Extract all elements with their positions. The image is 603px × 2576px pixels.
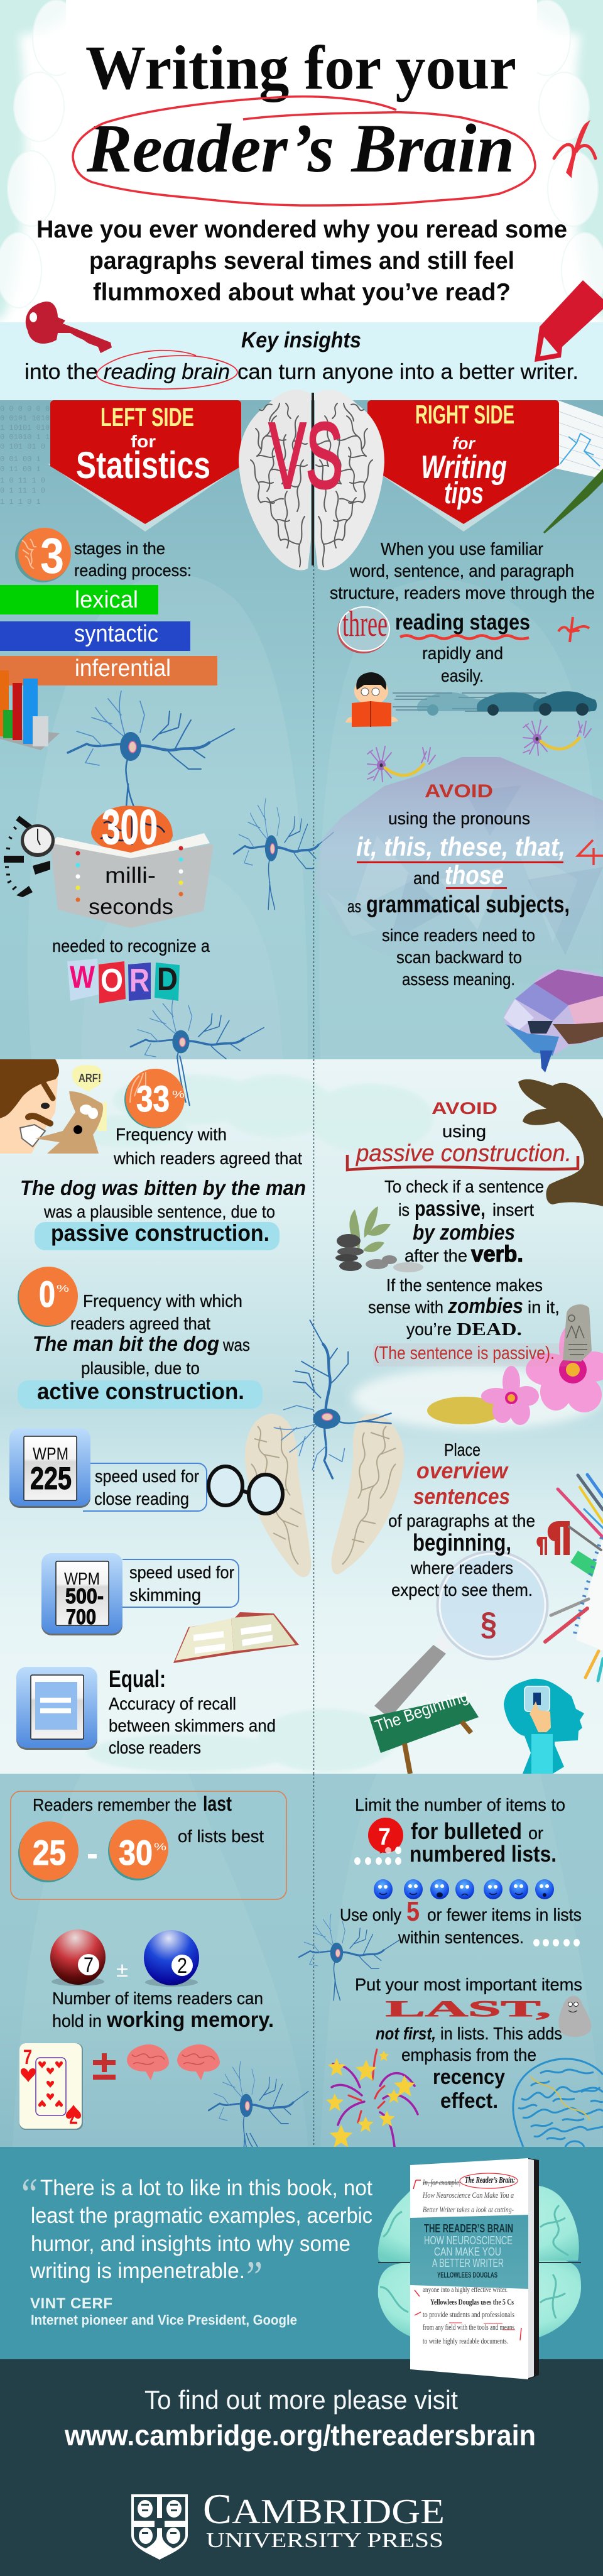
equal text: close readers [109, 1738, 201, 1757]
teal brain behind book [378, 2185, 581, 2340]
url: www.cambridge.org/thereadersbrain [64, 2419, 536, 2452]
tips: tips [444, 477, 484, 510]
callout: speed skimming [122, 1559, 239, 1607]
to check if passive text: passive, [415, 1197, 486, 1221]
place overview sentences text: expect to see them. [391, 1580, 533, 1600]
card: WPM 500-700: 700 [66, 1605, 96, 1629]
cover text below band: Yellowlees Douglas uses the 5 Cs [430, 2297, 514, 2306]
300: 300 [102, 799, 158, 854]
if the sentence text: zombies [447, 1294, 523, 1318]
equal text: Accuracy of recall [109, 1694, 236, 1713]
frequency text 2: The man bit the dog [33, 1332, 219, 1355]
icon: head with fingerprint [504, 1679, 584, 1774]
since readers need to: scan backward to [396, 947, 522, 967]
place overview sentences text: overview [416, 1458, 509, 1483]
WORD cut-out letters [67, 959, 180, 1003]
place overview sentences text: where readers [410, 1558, 513, 1578]
cover text above band: The Reader’s Brain: [465, 2176, 515, 2185]
quote: writing is impenetrable. [30, 2259, 245, 2283]
if the sentence text [368, 1275, 560, 1340]
place overview sentences text [388, 1440, 535, 1600]
card: WPM 225: 225 [30, 1461, 72, 1496]
billiard balls 7 plus minus 2 [50, 1929, 199, 1987]
icon: red pencil [535, 280, 603, 362]
cover band [410, 2215, 528, 2289]
call to action: To find out more please visit [144, 2385, 458, 2415]
avoid pronouns heading: AVOID [425, 781, 493, 802]
sign: the beginning [369, 1686, 479, 1774]
red hand-drawn ellipse [73, 97, 535, 205]
WORD cut-out letters: R [129, 963, 149, 999]
sentence: the dog was bitten: The dog was bitten by the man [20, 1176, 306, 1199]
WORD cut-out letters: W [70, 959, 95, 995]
working memory text: working memory. [106, 2008, 274, 2032]
quote: humor, and insights into why some [31, 2232, 350, 2256]
red squiggle underline [400, 636, 529, 639]
decorative lobes [13, 1774, 603, 2147]
cover text above band: How Neuroscience Can Make You a [422, 2190, 514, 2200]
card: WPM 500-700 [41, 1553, 122, 1635]
background: teal section [0, 400, 603, 1059]
place overview sentences text: beginning, [413, 1530, 511, 1556]
put most important last text: emphasis from the [401, 2045, 536, 2065]
brain halves [245, 1414, 404, 1577]
coloured dots [75, 846, 183, 902]
binary digits decoration: 1 10101 0101 [0, 423, 54, 432]
33 percent circle: 33 [136, 1079, 170, 1120]
frequency text 2: readers agreed that [70, 1314, 210, 1333]
blue smileys [374, 1879, 554, 1899]
Cambridge wordmark: AMBRIDGE [232, 2492, 445, 2531]
playing card 7 of hearts: 7 [23, 2046, 32, 2068]
limit items text: for bulleted [411, 1818, 522, 1844]
icon: speeding cars [393, 691, 597, 716]
writing: Writing [421, 449, 507, 486]
centre dashed divider [313, 565, 314, 2147]
binary digits decoration: 0 11 00 1 [0, 465, 41, 474]
box: readers remember: last [203, 1792, 232, 1815]
right chevron: right side for writing tips [365, 400, 562, 532]
rapidly and easily [422, 643, 503, 685]
book cover [50, 843, 214, 928]
binary digits decoration: 1 1 1 0 1 [0, 498, 41, 506]
use only 5 text: Use only [340, 1905, 401, 1924]
use only 5 text: within sentences. [398, 1928, 524, 1947]
book cover: CAN MAKE YOU [434, 2246, 501, 2258]
title line 2: Reader’s Brain [86, 110, 514, 187]
callout: speed close reading: speed used for [95, 1466, 199, 1486]
since readers need to: since readers need to [382, 925, 535, 945]
using: using [442, 1122, 486, 1141]
place overview sentences text: Place [444, 1440, 481, 1460]
icon: boy reading [345, 672, 398, 727]
card: equal [16, 1667, 97, 1750]
right: familiar structure: word, sentence, and paragraph [349, 561, 574, 581]
cartoon: man and dog: ARF! [79, 1072, 101, 1084]
intro question: flummoxed about what you’ve read? [93, 279, 511, 306]
icon: leaf and stones [335, 1206, 423, 1272]
needed to recognize a: needed to recognize a [52, 936, 210, 956]
30 circle [108, 1821, 167, 1880]
callout: speed skimming: speed used for [129, 1563, 234, 1582]
cover text above band: In, for example, [422, 2178, 460, 2188]
if the sentence text: If the sentence makes [386, 1275, 543, 1295]
if the sentence text: in it, [528, 1297, 560, 1317]
cover text below band: anyone into a highly effective writer. [423, 2285, 508, 2294]
card: WPM 500-700: WPM [64, 1569, 100, 1588]
put most important last text: LAST, [386, 1996, 551, 2021]
quote text: There is a lot to like in this book, not [40, 2176, 372, 2200]
0 percent circle [18, 1267, 78, 1327]
300 milliseconds book: seconds [89, 895, 173, 919]
icon: 3D bar chart [0, 670, 60, 750]
book cover: YELLOWLEES DOUGLAS [437, 2271, 497, 2279]
0 percent circle: 0 [39, 1274, 55, 1315]
frequency text 1: Frequency with [116, 1125, 227, 1144]
book cover [410, 2158, 539, 2379]
readers remember text: Readers remember the [33, 1795, 197, 1815]
stat: 3 stages [15, 528, 192, 584]
icon: maze brain [513, 2059, 603, 2147]
pronoun list: it, this, these, that, [356, 832, 565, 861]
red brain 1 [127, 2044, 169, 2080]
neuron 2 [234, 799, 334, 909]
pilcrow marks [536, 1521, 570, 1555]
right: familiar structure: structure, readers move through the [330, 583, 595, 603]
book pages [50, 833, 210, 860]
red pin 7 [368, 1818, 403, 1853]
binary digits decoration [0, 405, 54, 506]
cover text below band: to write highly readable documents. [423, 2336, 508, 2345]
three badge: three [342, 603, 388, 644]
left side label: LEFT SIDE [100, 402, 194, 432]
to check if passive text: by zombies [413, 1221, 515, 1245]
white bullet dots [354, 1847, 401, 1865]
Cambridge shield [131, 2494, 188, 2560]
icon: notebook and pencils [545, 1475, 603, 1681]
intro question [36, 216, 567, 306]
cover text above band: Better Writer takes a look at cutting- [423, 2205, 514, 2214]
if the sentence text: DEAD. [457, 1320, 522, 1340]
to check if passive text: verb. [471, 1241, 523, 1267]
since readers need to [382, 925, 535, 989]
billiard balls 7 plus minus 2: 7 [84, 1953, 94, 1977]
if the sentence text: you’re [406, 1319, 452, 1339]
key insights sentence: can turn anyone into a better writer. [237, 360, 579, 384]
red brain 2 [177, 2044, 220, 2080]
cartoon: man and dog [0, 1059, 107, 1154]
intro question: Have you ever wondered why you reread some [36, 216, 567, 243]
book cover: HOW NEUROSCIENCE [424, 2234, 513, 2247]
box: readers remember [11, 1791, 286, 1899]
the sentence is passive band: (The sentence is passive). [374, 1343, 555, 1363]
right: familiar structure: When you use familiar [381, 539, 543, 559]
binary digits decoration: 0 101 01 0 [0, 442, 45, 451]
callout: speed close reading: close reading [94, 1489, 189, 1509]
purple neuron a [523, 720, 591, 755]
bar: lexical: lexical [75, 587, 138, 613]
red proofreading mark [558, 617, 589, 642]
flower image [352, 1324, 603, 1429]
sign: the beginning: The Beginning [372, 1686, 471, 1736]
limit items text: numbered lists. [410, 1841, 557, 1867]
pill: passive construction: passive construction. [51, 1220, 269, 1246]
notepad with sketch and pen [544, 400, 603, 533]
to check if passive text: insert [492, 1200, 534, 1220]
low-poly brain stem over section edge [540, 1051, 553, 1072]
footer band [0, 2359, 603, 2576]
right: familiar structure [330, 539, 595, 603]
decorative folds [0, 0, 603, 322]
card: WPM 225: WPM [33, 1444, 68, 1463]
frequency text 1 [113, 1125, 302, 1168]
playing card 7 of hearts [19, 2043, 83, 2130]
frequency text 1: which readers agreed that [113, 1149, 302, 1168]
cover text above band [413, 2173, 518, 2214]
pill: active construction: active construction. [37, 1378, 244, 1404]
billiard balls 7 plus minus 2: 2 [177, 1954, 187, 1978]
card: WPM 500-700: 500- [65, 1585, 104, 1608]
red numeral four [578, 840, 603, 865]
neuron 1 [68, 691, 234, 814]
low-poly colour brain [504, 969, 603, 1056]
card: WPM 225 [9, 1428, 90, 1508]
purple neuron b [367, 746, 435, 782]
rapidly and easily: easily. [441, 666, 484, 685]
red ellipse around reading brain [97, 351, 237, 389]
neuron 4 [274, 1320, 391, 1478]
orange brain [91, 805, 173, 856]
left chevron: left side for statistics [48, 400, 244, 532]
WORD cut-out letters: O [100, 963, 123, 999]
bar: inferential: inferential [75, 655, 171, 682]
equal text: Equal: [109, 1666, 166, 1693]
three badge [337, 603, 389, 653]
to check if passive text: after the [405, 1246, 467, 1265]
binary digits decoration: 0 0 0 0 0 0 [0, 405, 50, 413]
quote [21, 2169, 372, 2328]
was a plausible sentence: was a plausible sentence, due to [43, 1202, 275, 1221]
to check if passive text: is [398, 1200, 410, 1220]
put most important last text: in lists. This adds [440, 2024, 562, 2043]
if the sentence text: sense with [368, 1297, 443, 1317]
equal text [109, 1666, 276, 1757]
cover text below band: from any field with the tools and means [423, 2322, 514, 2332]
frequency text 2: was [222, 1335, 250, 1355]
bar: inferential [0, 655, 217, 685]
background: white title area [0, 0, 603, 322]
opening quote mark: “ [21, 2169, 38, 2219]
put most important last text [355, 1975, 582, 2113]
bar: lexical [0, 585, 158, 614]
33 percent circle [124, 1069, 185, 1128]
for: for [452, 434, 476, 453]
pronoun list: those [445, 860, 504, 890]
icon: tombstone [563, 1304, 592, 1362]
binary digits decoration: 0 01 00 1 [0, 455, 41, 464]
icon: magnifier [374, 1553, 546, 1718]
key insights sentence [24, 360, 579, 384]
stat: 3 stages: reading process: [74, 561, 192, 580]
callout: speed close reading [83, 1463, 207, 1511]
pronoun list: and [413, 868, 440, 888]
red pin 7: 7 [378, 1824, 391, 1850]
decorative brain folds [63, 1074, 433, 1772]
frequency text 2: Frequency with which [83, 1291, 242, 1311]
key insights band [0, 322, 603, 400]
25 circle [18, 1823, 77, 1882]
icon: red key [26, 302, 112, 353]
neuron 5 [299, 1914, 399, 2000]
bar: syntactic [0, 621, 190, 651]
frequency text 2: plausible, due to [81, 1358, 200, 1378]
billiard balls 7 plus minus 2: ± [116, 1958, 128, 1981]
icon: open book [173, 1612, 299, 1663]
working memory text: hold in [52, 2011, 102, 2031]
limit items text: or [528, 1823, 543, 1843]
use only 5 text: 5 [406, 1896, 420, 1927]
book cover: A BETTER WRITER [432, 2257, 504, 2269]
equal text: between skimmers and [109, 1716, 276, 1735]
callout: speed skimming: skimming [129, 1585, 201, 1605]
binary digits decoration: 0 01010 1 10 [0, 433, 54, 442]
place overview sentences text: of paragraphs at the [388, 1511, 535, 1531]
place overview sentences text: sentences [413, 1483, 510, 1509]
0 percent circle: % [57, 1284, 69, 1294]
icon: glasses [209, 1466, 283, 1514]
working memory text: Number of items readers can [52, 1989, 263, 2008]
zombie hand [518, 1079, 603, 1206]
key insights sentence: reading brain [104, 360, 230, 384]
intro question: paragraphs several times and still feel [89, 248, 514, 275]
box: readers remember: 30 [119, 1833, 153, 1872]
pronoun list [356, 832, 565, 890]
quote: least the pragmatic examples, acerbic [31, 2203, 372, 2228]
binary digits decoration: 0 0101 10101 [0, 414, 54, 423]
right side label: RIGHT SIDE [415, 400, 514, 429]
box: readers remember: 25 [33, 1833, 66, 1872]
put most important last text: not first, [376, 2024, 436, 2043]
statistics: Statistics [76, 444, 210, 486]
limit items text: Limit the number of items to [355, 1795, 565, 1815]
working memory text [52, 1989, 274, 2032]
brain top view [239, 390, 384, 570]
icon: stopwatch [4, 818, 55, 897]
neuron 6 [209, 2061, 308, 2159]
red proofreading mark [554, 124, 595, 175]
dash [88, 1854, 97, 1858]
put most important last text: effect. [440, 2089, 498, 2113]
300 milliseconds book [50, 799, 214, 928]
since readers need to: assess meaning. [402, 969, 515, 989]
to check if passive text [384, 1177, 544, 1267]
box: readers remember: % [154, 1841, 166, 1853]
cover title: THE READER’S BRAIN [424, 2222, 513, 2235]
using the pronouns: using the pronouns [388, 809, 530, 828]
passive construction in red: passive construction. [356, 1140, 572, 1167]
binary digits decoration: 1 0 11 1 0 [0, 476, 45, 485]
title line 1: Writing for your [85, 33, 516, 102]
neuron 3 [131, 998, 264, 1096]
red bracket [347, 1155, 578, 1170]
put most important last text: recency [433, 2065, 505, 2089]
use only 5 text [340, 1896, 582, 1947]
milli-seconds: milli- [105, 863, 156, 888]
of lists best: of lists best [178, 1826, 264, 1846]
rapidly and easily: rapidly and [422, 643, 503, 663]
Cambridge wordmark: UNIVERSITY PRESS [206, 2529, 443, 2552]
key insights sentence: into the [24, 360, 98, 384]
background: lower teal section [0, 1774, 603, 2147]
key insights heading: Key insights [241, 328, 361, 352]
cover text below band [415, 2285, 521, 2345]
closing quote mark: ” [246, 2252, 263, 2302]
five white dots [533, 1939, 580, 1946]
WORD cut-out letters: D [157, 961, 178, 998]
background: light section [0, 1059, 603, 1774]
stages text: stages in the [74, 539, 165, 558]
Cambridge wordmark: C [203, 2485, 232, 2533]
Cambridge wordmark [203, 2485, 445, 2552]
low-poly translucent brain behind AVOID text [313, 757, 603, 985]
frequency text 2 [33, 1291, 250, 1378]
limit items text [355, 1795, 565, 1867]
attribution: VINT CERF [30, 2295, 112, 2312]
reading stages: reading stages [395, 610, 530, 635]
cover text below band: to provide students and professionals [423, 2310, 514, 2319]
quote: Internet pioneer and Vice President, Google [31, 2312, 297, 2328]
neuron 3 axon over section edge [177, 1056, 190, 1106]
bar: syntactic: syntactic [74, 621, 158, 647]
section symbol: § [481, 1606, 497, 1642]
playing card 7 of hearts: 7 [69, 2105, 78, 2128]
stat: 3 stages: 3 [40, 528, 64, 584]
binary digits decoration: 0 1 11 1 0 [0, 486, 45, 495]
right: AVOID passive heading: AVOID [432, 1099, 497, 1118]
neuron 6 axon over section edge [246, 2133, 258, 2147]
orange brain circle with 3 [15, 528, 70, 582]
grammatical subjects: as [347, 897, 361, 916]
quote band [0, 2147, 603, 2359]
decorative lobes [28, 574, 603, 1059]
icon: fireworks [326, 2049, 418, 2148]
VS letters: VS [269, 404, 343, 508]
use only 5 text: or fewer items in lists [427, 1905, 582, 1924]
put most important last text: Put your most important items [355, 1975, 582, 1994]
icon: smiling rock [558, 1995, 591, 2037]
33 percent circle: % [172, 1089, 185, 1100]
plus minus symbol [93, 2053, 116, 2080]
for: for [131, 432, 156, 451]
to check if passive text: To check if a sentence [384, 1177, 544, 1196]
